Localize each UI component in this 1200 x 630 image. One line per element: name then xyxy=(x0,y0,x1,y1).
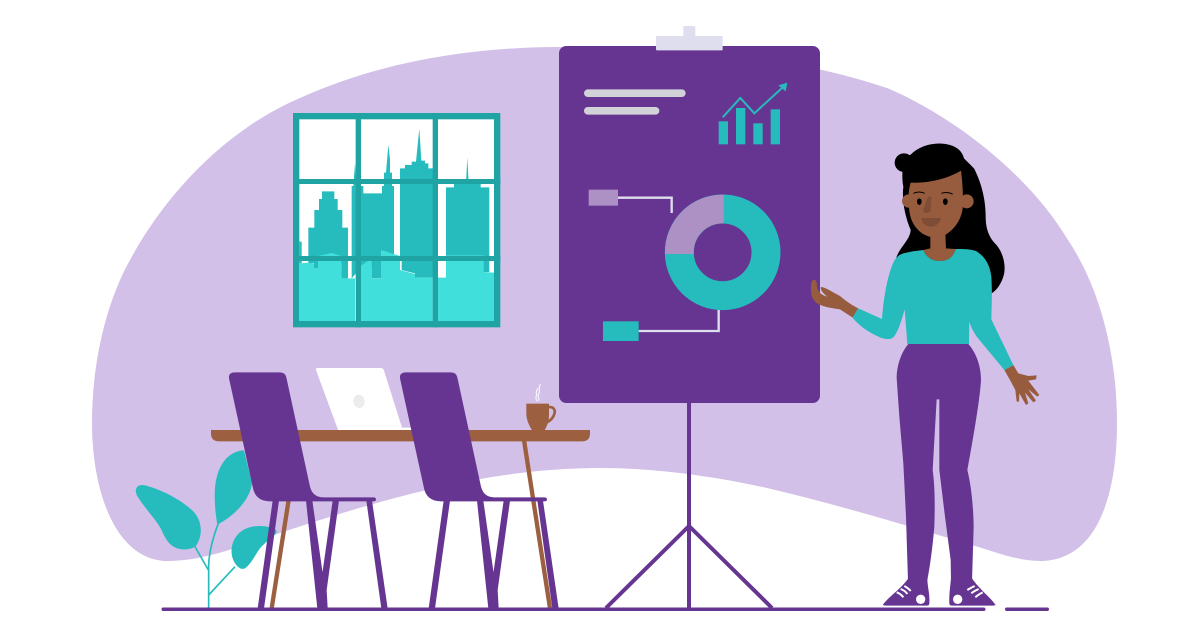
right shoe xyxy=(949,578,996,606)
neck xyxy=(923,233,956,261)
board clip xyxy=(656,26,723,50)
foreground water xyxy=(299,250,494,321)
plant stems xyxy=(195,523,235,608)
laptop xyxy=(316,368,413,431)
plant xyxy=(136,450,277,608)
shoes xyxy=(883,578,996,606)
facial features xyxy=(913,192,953,227)
face xyxy=(909,171,963,238)
left shoe xyxy=(883,578,929,606)
plant leaves xyxy=(136,450,277,569)
hand at side xyxy=(1004,365,1039,405)
table legs xyxy=(272,440,550,608)
skyline buildings xyxy=(299,128,489,278)
ground line xyxy=(162,608,1049,611)
coffee cup xyxy=(526,384,555,431)
chairs xyxy=(229,372,559,608)
board panel xyxy=(559,46,820,403)
presentation board xyxy=(559,26,820,403)
hand pointing at board xyxy=(811,280,858,318)
legend callout: lilac xyxy=(589,190,672,213)
table top xyxy=(211,430,590,441)
window with city skyline xyxy=(293,113,500,327)
hair xyxy=(895,143,1005,293)
window frame mullions xyxy=(293,113,500,327)
sweater xyxy=(852,249,1013,370)
text placeholder lines xyxy=(584,89,686,115)
easel stand xyxy=(606,400,772,609)
pants xyxy=(897,344,981,582)
ears xyxy=(902,194,974,208)
donut chart xyxy=(665,195,766,296)
chair left xyxy=(229,372,388,608)
legend callout: teal xyxy=(603,310,719,341)
mini bar chart with trend arrow xyxy=(719,83,787,144)
table with laptop and cup xyxy=(211,368,590,608)
background blob xyxy=(92,47,1117,561)
presenter woman xyxy=(811,143,1039,606)
chair right xyxy=(400,372,559,608)
